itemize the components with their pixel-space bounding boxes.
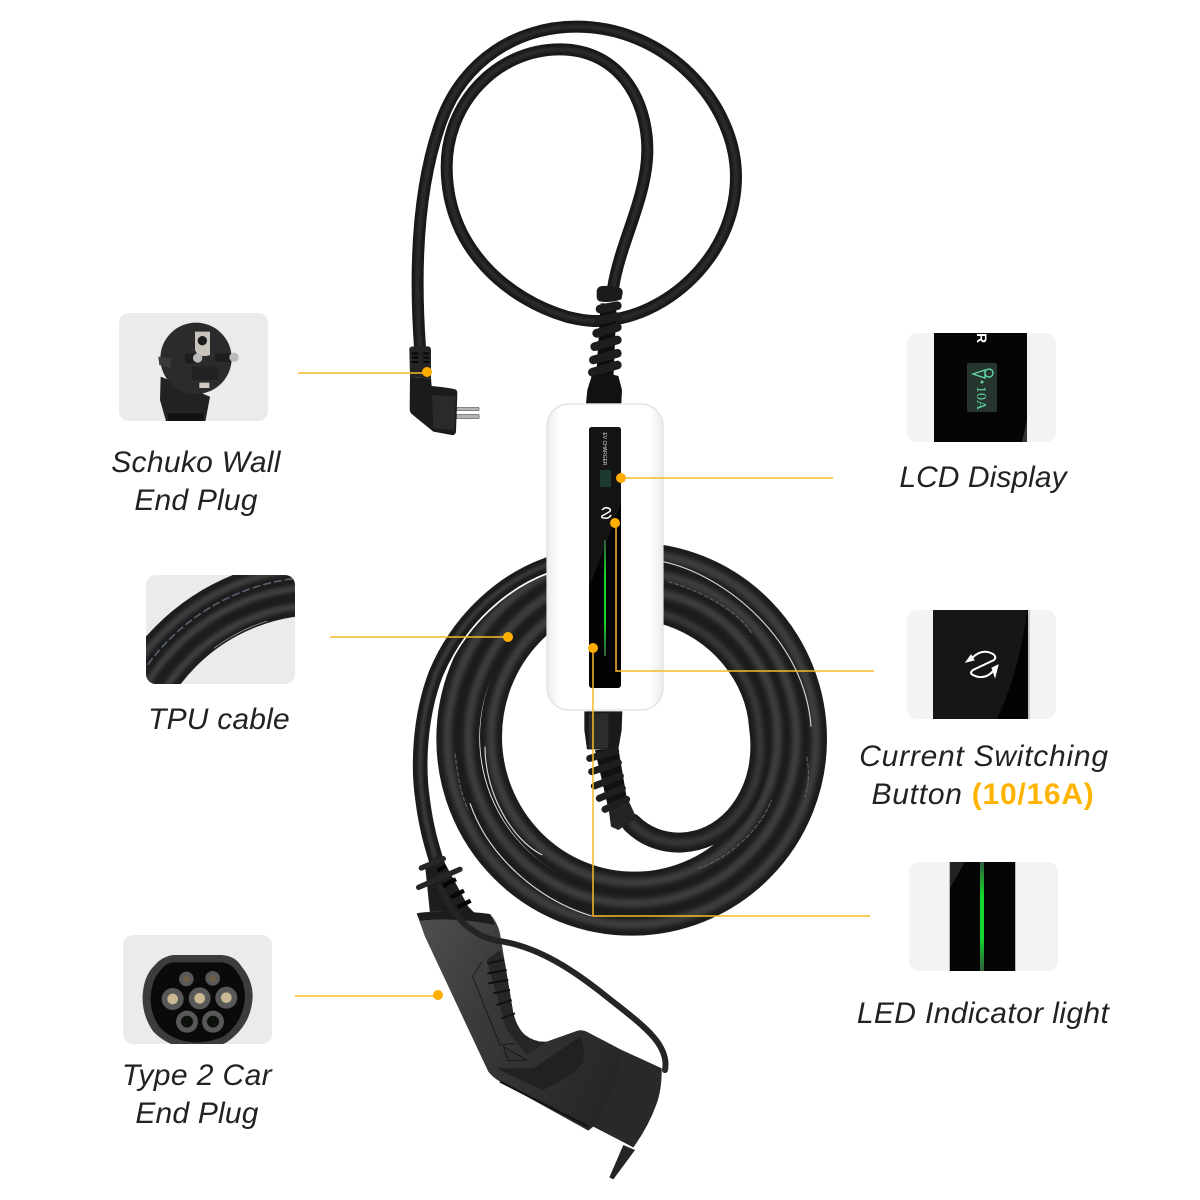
label: Schuko Wall End Plug: [111, 446, 282, 517]
small LCD: [600, 470, 611, 487]
Schuko plug on cable: [409, 346, 479, 435]
charger control box: [547, 404, 663, 710]
cap tab: [609, 1145, 635, 1179]
coiled cable: [420, 553, 816, 925]
EV charger panel text: EV CHARGER: [601, 432, 607, 466]
plug grip: [487, 950, 547, 1055]
top power cable loop: [418, 27, 736, 347]
label: Type 2 Car End Plug: End Plug: [135, 1097, 259, 1130]
label: TPU cable: TPU cable: [148, 703, 290, 736]
callout: Type 2 plug: [295, 990, 443, 1000]
label: LCD Display: LCD Display: [899, 461, 1069, 494]
label: Type 2 Car End Plug: [122, 1059, 273, 1130]
upper strain relief: [586, 286, 623, 403]
callout: TPU cable: [330, 632, 513, 642]
thumbnail: Schuko plug: [119, 313, 268, 423]
label: Current Switching Button (10/16A): Current Switching: [859, 740, 1109, 773]
LED strip: [604, 540, 606, 656]
callout: LED indicator: [588, 643, 870, 916]
label: Schuko Wall End Plug: End Plug: [134, 484, 258, 517]
box housing: [547, 404, 663, 710]
label: Schuko Wall End Plug: Schuko Wall: [111, 446, 282, 479]
callout: Schuko plug: [298, 367, 432, 377]
cable highlights: [455, 562, 811, 916]
plug head band: [593, 1050, 662, 1147]
thumbnail: Type 2 plug face: [123, 935, 272, 1049]
coil ring middle: [468, 573, 796, 903]
coil ring outer: [447, 553, 816, 925]
coil ring inner: [491, 591, 778, 883]
thumbnail: LCD display: R: [974, 333, 990, 343]
label: Current Switching Button (10/16A): Button (10/16A): [871, 778, 1095, 811]
callout: LCD display: [616, 473, 833, 483]
Type 2 car plug: [417, 854, 666, 1179]
label: Type 2 Car End Plug: Type 2 Car: [122, 1059, 273, 1092]
lanyard cap strap: [440, 887, 666, 1070]
plug body: [417, 911, 662, 1147]
cable tail to strain relief: [632, 614, 760, 843]
switch icon: [602, 508, 611, 518]
thumbnail: LED indicator: [909, 862, 1058, 971]
plug recess: [497, 1037, 584, 1090]
label: LED Indicator light: LED Indicator light: [857, 997, 1110, 1030]
callout: current switching button: [610, 518, 874, 671]
thumbnail: TPU cable: [146, 575, 295, 684]
black front panel: [589, 427, 621, 688]
thumbnail: current switching button: [907, 610, 1056, 719]
switch icon: [966, 652, 998, 677]
cable leaving to car plug: [420, 553, 592, 867]
plug strain relief: [419, 854, 477, 915]
lower strain relief: [584, 711, 637, 830]
thumbnail: LCD display: [907, 333, 1056, 442]
thumbnail: LCD display: 10A: [973, 386, 988, 411]
label: Current Switching Button (10/16A): [859, 740, 1109, 811]
